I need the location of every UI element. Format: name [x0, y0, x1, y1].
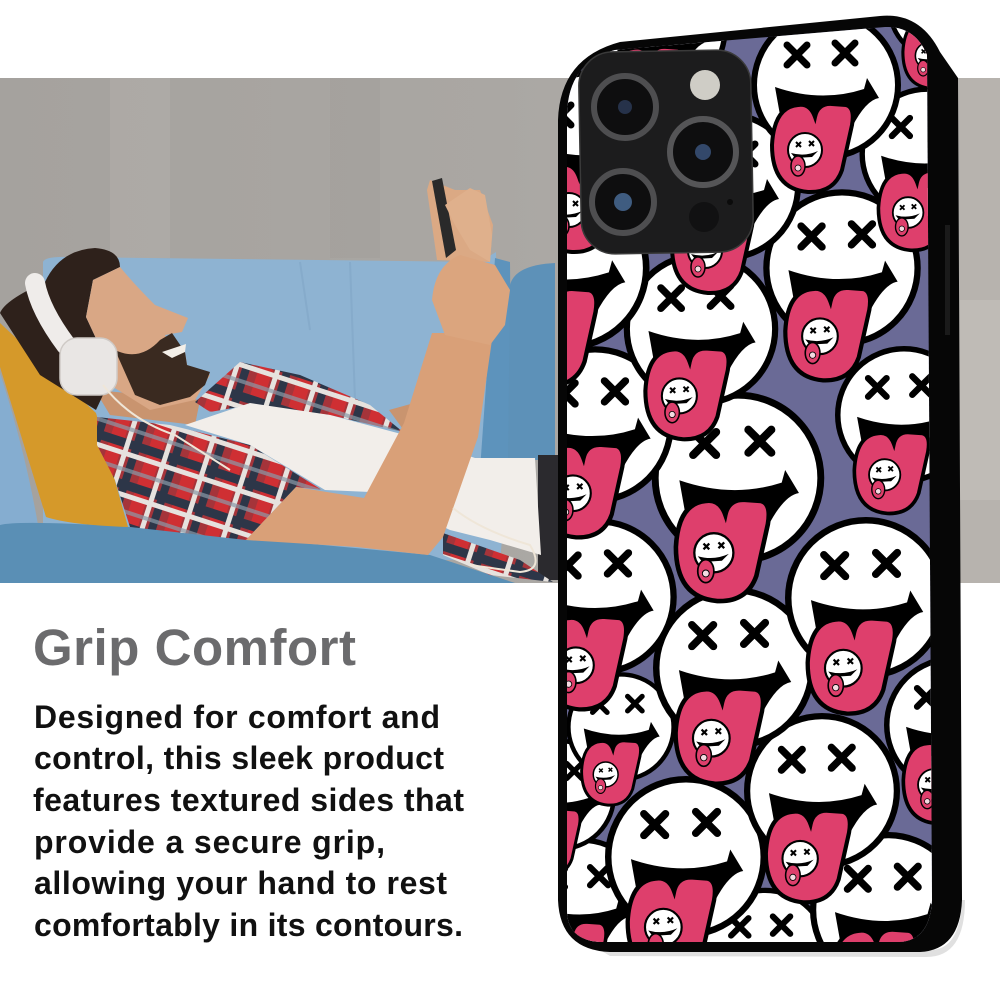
beard — [115, 333, 210, 405]
camera module — [578, 50, 754, 254]
smile — [162, 344, 186, 358]
concrete wall — [0, 78, 1000, 583]
smiley pattern artwork — [567, 27, 932, 942]
upper hand — [427, 180, 493, 262]
white t-shirt — [185, 403, 541, 555]
sofa right arm — [508, 263, 555, 460]
body text: allowing your hand to rest — [34, 865, 447, 901]
body text: Designed for comfort and — [34, 699, 440, 735]
flash — [690, 70, 720, 100]
hair — [0, 248, 120, 410]
lower hand — [432, 255, 510, 345]
microphone — [727, 199, 733, 205]
jeans — [538, 455, 558, 580]
headphones — [35, 283, 117, 395]
lifestyle photo: man on sofa — [0, 78, 1000, 583]
face — [86, 267, 210, 410]
neck — [100, 392, 199, 424]
back forearm — [389, 404, 410, 428]
phone case — [558, 16, 962, 952]
body text: provide a secure grip, — [34, 824, 385, 860]
earphone cable — [103, 385, 536, 572]
body text: features textured sides that — [33, 782, 464, 818]
heading: Grip Comfort — [33, 619, 356, 676]
body text: control, this sleek product — [34, 740, 444, 776]
lens bottom left — [592, 171, 654, 233]
arm — [246, 333, 493, 555]
body text — [33, 699, 464, 943]
lens top left — [594, 76, 656, 138]
phone shadow — [600, 900, 965, 957]
sofa left arm — [0, 373, 38, 530]
body text: comfortably in its contours. — [34, 907, 463, 943]
sofa seat — [0, 523, 515, 583]
yellow pillow — [0, 323, 128, 527]
plaid shirt — [97, 362, 553, 582]
lens right — [670, 119, 736, 185]
side button — [945, 225, 950, 335]
sofa back — [43, 252, 512, 560]
fingers — [445, 188, 492, 262]
lidar sensor — [689, 202, 719, 232]
phone in hand — [432, 178, 456, 258]
case body — [558, 16, 962, 952]
